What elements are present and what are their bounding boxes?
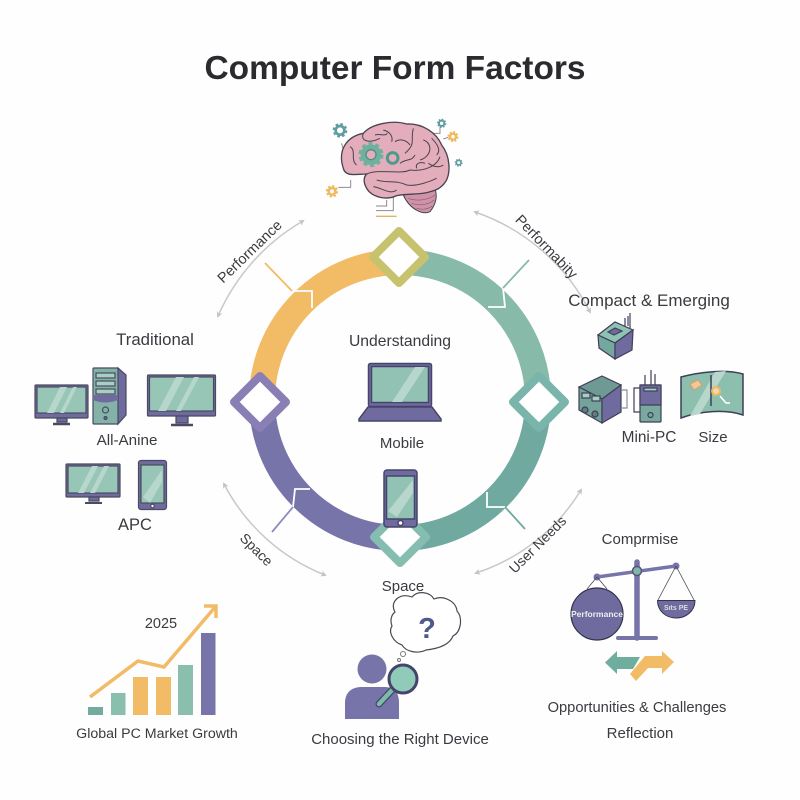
icon: monitor right [148, 375, 216, 425]
panel: traditional [35, 330, 216, 534]
label: user needs: User Needs [506, 513, 569, 576]
label: space arc: Space [237, 530, 276, 569]
icon: laptop [359, 364, 441, 421]
icon: phone [384, 470, 417, 527]
icon: exchange arrows [605, 651, 674, 681]
heading: traditional: Traditional [116, 330, 194, 349]
diamond: left [234, 376, 286, 428]
diamond: bottom [374, 511, 426, 563]
label: space: Space [382, 578, 424, 595]
label: performance: Performance [215, 218, 286, 287]
chart bars [88, 633, 216, 715]
pan: size [658, 600, 695, 618]
icon: tablet [138, 460, 166, 510]
icon: mini pc [634, 370, 661, 422]
panel: compromise [548, 531, 726, 742]
ring notches and ticks [265, 260, 529, 532]
curved arrow: user needs [476, 490, 581, 573]
label: all-anine: All-Anine [97, 432, 157, 449]
ring segment: light teal [400, 262, 538, 400]
label: performability: Performabity [512, 212, 581, 283]
icon: monitor lower [66, 464, 120, 503]
curved arrow: performability right [475, 212, 590, 312]
icon: monitor left [35, 385, 88, 424]
title: Computer Form Factors [204, 49, 586, 86]
diamond: right [513, 376, 565, 428]
label: choosing the right device: Choosing the Right Device [311, 731, 489, 748]
ring segment: orange [262, 262, 400, 400]
label: size: Size [698, 429, 728, 446]
icon: brain with gears [327, 119, 462, 216]
icon: person [345, 654, 399, 719]
panel: market growth chart [76, 606, 238, 742]
curved arrow: performance left [218, 221, 303, 316]
ring segment: purple [262, 400, 400, 538]
icon: balance scale [571, 562, 695, 640]
icon: magnifying glass [379, 665, 417, 704]
thought bubble [391, 593, 460, 662]
label: opportunities and challenges: Opportunities & Challenges [548, 700, 726, 716]
trend arrow [90, 606, 216, 697]
label: mobile: Mobile [380, 435, 424, 452]
curved arrow: space [224, 484, 325, 575]
ring segment: dark teal [400, 400, 538, 538]
icon: box computer [579, 376, 627, 423]
central ring [234, 231, 565, 563]
diamond: top [373, 231, 425, 283]
heading: compromise: Comprmise [602, 531, 678, 548]
icon: tower [93, 368, 126, 424]
weight: performance [571, 588, 623, 640]
icon: flexible display [681, 371, 743, 418]
panel: choosing the right device [311, 578, 489, 748]
question mark: ? [418, 613, 436, 645]
label: mini-pc: Mini-PC [622, 429, 676, 446]
icon: balance scale: Sıts PE [664, 605, 688, 612]
icon: balance scale: Performance [571, 609, 623, 619]
icon: small cube computer [598, 313, 633, 359]
label: reflection: Reflection [607, 725, 673, 742]
heading: compact and emerging: Compact & Emerging [568, 291, 730, 310]
label: global pc market growth: Global PC Market Growth [76, 726, 238, 742]
label: 2025: 2025 [145, 616, 177, 632]
panel: compact and emerging [568, 291, 743, 446]
label: understanding: Understanding [349, 333, 451, 350]
label: apc: APC [118, 516, 152, 534]
